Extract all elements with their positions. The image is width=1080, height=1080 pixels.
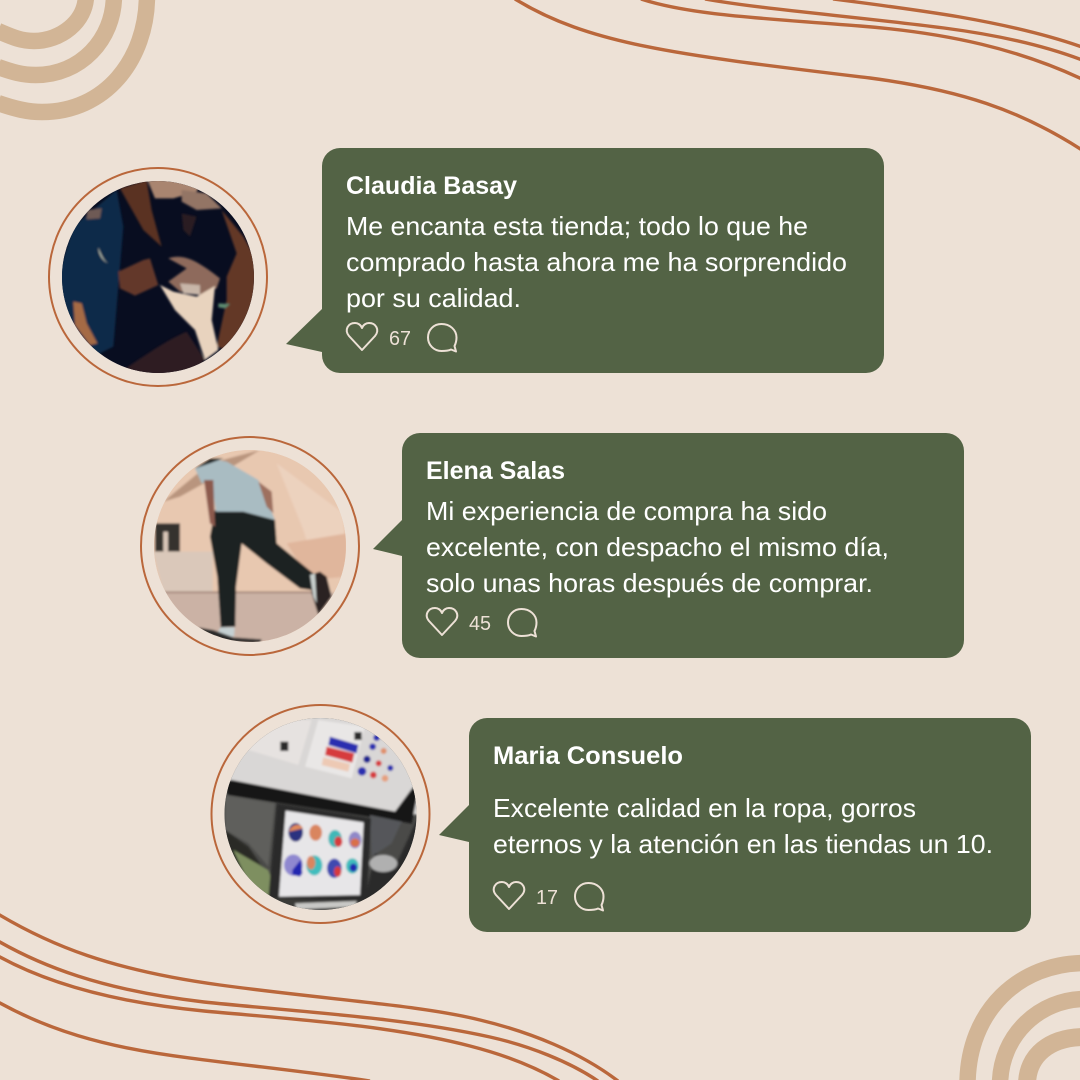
comment bubble: Claudia Basay: por su calidad. [346, 283, 521, 313]
comment bubble: Elena Salas: excelente, con despacho el mismo día, [426, 532, 889, 562]
reactions: likes and comments: 17 [536, 887, 558, 909]
reactions: likes and comments [347, 323, 456, 352]
comment bubble: Claudia Basay: Me encanta esta tienda; todo lo que he [346, 211, 808, 241]
comment bubble: Elena Salas: Elena Salas [426, 457, 565, 485]
decoration: top-right wavy lines [515, 0, 1080, 150]
decoration: top-left concentric arcs [0, 0, 147, 112]
comment bubble: Elena Salas: solo unas horas después de comprar. [426, 568, 873, 598]
avatar: Elena, skateboarder [141, 437, 359, 655]
avatar: Claudia, friends holding drinks [49, 168, 267, 386]
comment bubble: Maria Consuelo: eternos y la atención en las tiendas un 10. [493, 829, 993, 859]
reactions: likes and comments: 67 [389, 328, 411, 350]
comment bubble: Maria Consuelo: Maria Consuelo [493, 742, 683, 770]
comment bubble: Elena Salas: Mi experiencia de compra ha sido [426, 496, 827, 526]
reactions: likes and comments: 45 [469, 613, 491, 635]
comment bubble: Claudia Basay: comprado hasta ahora me ha sorprendido [346, 247, 847, 277]
reactions: likes and comments [427, 608, 536, 636]
reactions: likes and comments [494, 882, 604, 910]
comment bubble: Maria Consuelo [439, 718, 1031, 932]
comment bubble: Claudia Basay [286, 148, 884, 373]
comment bubble: Claudia Basay: Claudia Basay [346, 172, 517, 200]
decoration: bottom-right concentric arcs [968, 963, 1080, 1080]
avatar: Maria, tablet with colour swatches [212, 705, 430, 923]
comment bubble: Elena Salas [373, 433, 964, 658]
comment bubble: Maria Consuelo: Excelente calidad en la ropa, gorros [493, 793, 916, 823]
decoration: bottom-left wavy lines [0, 914, 618, 1080]
